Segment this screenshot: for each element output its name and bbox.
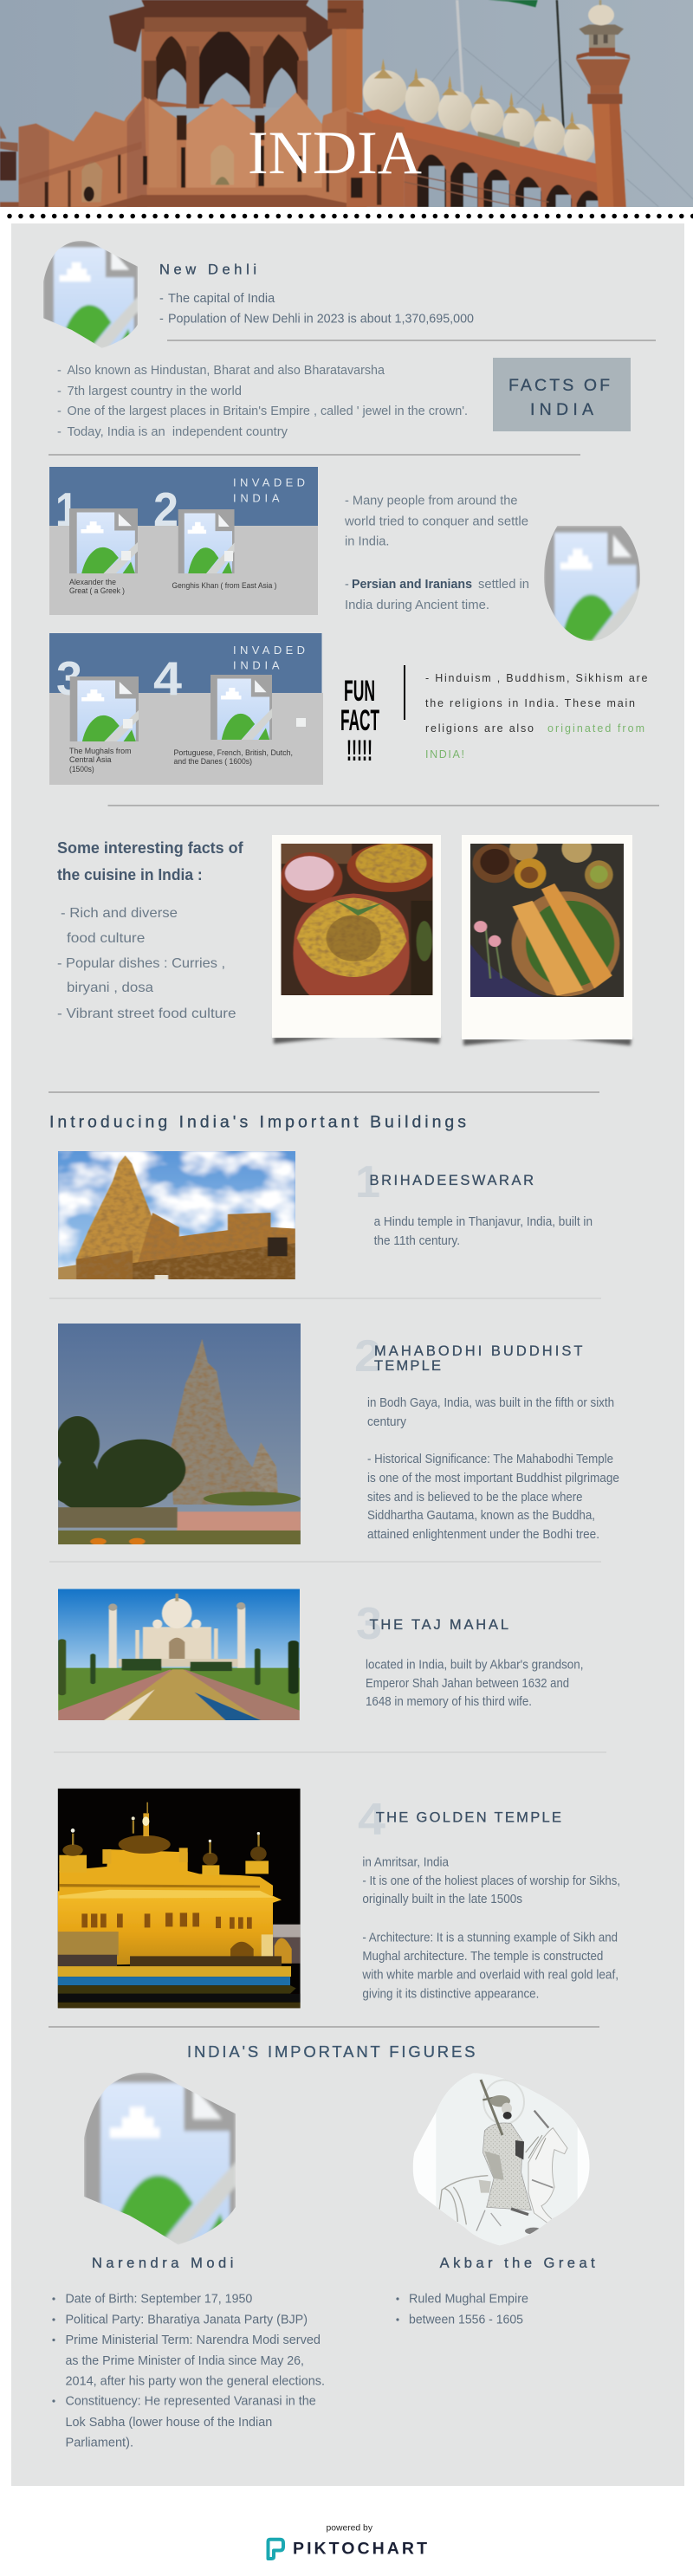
hero photo: Red Fort <box>0 0 693 207</box>
number 3: 3 <box>56 651 82 705</box>
text: Golden Temple description: originally built in the late 1500s <box>362 1893 522 1906</box>
caption: Alexander <box>69 578 125 595</box>
text: facts list: Also known as Hindustan, Bharat and also Bharatavarsha <box>68 364 385 378</box>
image: Modi blob placeholder <box>84 2072 236 2245</box>
section: Taj Mahal <box>58 1589 584 1720</box>
name: Narendra Modi: Narendra Modi <box>92 2256 233 2271</box>
text: Modi bullet list: as the Prime Minister of India since May 26, <box>66 2354 304 2368</box>
text: cuisine list: - Rich and diverse <box>61 906 178 921</box>
text: Piktochart wordmark: PIKTOCHART <box>293 2540 427 2559</box>
callout: facts of India box: INDIA <box>530 400 593 419</box>
text: cuisine list: biryani , dosa <box>67 981 153 995</box>
text: invaders description: - Many people from around the <box>345 495 518 508</box>
text: Mahabodhi description: in Bodh Gaya, India, was built in the fifth or sixth <box>367 1396 614 1410</box>
heading: fun fact: !!!!! <box>346 735 372 767</box>
text: Golden Temple description: - Architecture: It is a stunning example of Sikh and <box>362 1932 618 1945</box>
panel: invaded India 3 and 4 <box>49 633 323 785</box>
heading: fun fact: FUN <box>344 675 375 708</box>
text: cuisine list: food culture <box>67 931 145 946</box>
text: Golden Temple description: giving it its distinctive appearance. <box>362 1987 539 2001</box>
text: religions: originated from <box>547 722 644 735</box>
text: invaders description: in India. <box>345 535 390 549</box>
text: Mahabodhi description: century <box>367 1415 407 1429</box>
text: religions: INDIA! <box>425 748 464 761</box>
icon: Piktochart logo <box>269 2540 283 2559</box>
heading: Mahabodhi: MAHABODHI BUDDHIST <box>374 1343 582 1359</box>
text: facts list: - <box>57 405 62 418</box>
text: Mahabodhi description: Siddhartha Gautama, known as the Buddha, <box>367 1509 595 1523</box>
text: Modi bullet list: Parliament). <box>66 2436 133 2450</box>
pavilion <box>141 20 308 107</box>
text: religions: the religions in India. These main <box>425 697 635 709</box>
text: facts list: 7th largest country in the world <box>68 385 242 398</box>
section: New Delhi <box>43 241 474 348</box>
text: religions: - Hinduism , Buddhism, Sikhism are <box>425 672 648 684</box>
text: Modi bullet list: Constituency: He represented Varanasi in the <box>66 2395 316 2409</box>
heading: invaded India: INVADED <box>233 476 305 489</box>
text: Taj Mahal description: located in India, built by Akbar's grandson, <box>366 1658 584 1672</box>
section: Narendra Modi <box>52 2073 325 2450</box>
text: Mahabodhi description: is one of the most important Buddhist pilgrimage <box>367 1472 619 1485</box>
text: powered by: powered by <box>326 2522 373 2533</box>
number 4: 4 <box>153 651 182 705</box>
footer: powered by Piktochart <box>269 2522 427 2559</box>
section: Mahabodhi <box>53 1324 619 1545</box>
text: Modi bullet list: Lok Sabha (lower house of the Indian <box>66 2416 272 2430</box>
caption: Mughals <box>69 747 132 773</box>
image: Alexander placeholder <box>69 508 138 573</box>
text: Mahabodhi description: - Historical Significance: The Mahabodhi Temple <box>367 1453 613 1466</box>
heading: Golden Temple: THE GOLDEN TEMPLE <box>376 1810 561 1826</box>
text: facts list: - <box>57 425 62 439</box>
domes <box>363 70 407 113</box>
number 2: 2 <box>153 482 178 536</box>
text: Modi bullet list: Political Party: Bharatiya Janata Party (BJP) <box>66 2313 308 2327</box>
heading: Taj Mahal: THE TAJ MAHAL <box>369 1617 508 1633</box>
image: oval placeholder <box>544 526 640 641</box>
text: Golden Temple description <box>361 1856 620 2001</box>
text: Modi bullet list: 2014, after his party won the general elections. <box>66 2375 325 2389</box>
tall tower <box>332 29 362 113</box>
dotted divider <box>10 214 693 218</box>
text: facts list <box>57 364 468 439</box>
text: New Delhi facts <box>159 292 474 327</box>
text: Taj Mahal description: 1648 in memory of his third wife. <box>366 1695 532 1709</box>
number 4: 4 <box>358 1795 385 1845</box>
arcade <box>405 130 606 207</box>
text: Golden Temple description: - It is one of the holiest places of worship for Sikhs, <box>362 1874 620 1888</box>
text: invaders description: world tried to conquer and settle <box>344 515 528 529</box>
base wall <box>19 93 366 208</box>
text: Mahabodhi description <box>367 1396 619 1542</box>
text: facts list: - <box>57 364 62 378</box>
text: invaders description: - <box>345 578 349 592</box>
heading: Brihadeeswarar: BRIHADEESWARAR <box>369 1173 534 1188</box>
image: Mughals placeholder <box>70 676 139 741</box>
photo: Taj Mahal <box>58 1589 300 1720</box>
section: Brihadeeswarar <box>58 1151 593 1279</box>
text: religions <box>425 672 648 761</box>
heading: Mahabodhi <box>374 1343 582 1374</box>
caption: Mughals: The Mughals from <box>69 747 132 755</box>
text: Brihadeeswarar description: the 11th century. <box>374 1234 460 1248</box>
text: New Delhi facts: Population of New Dehli in 2023 is about 1,370,695,000 <box>168 313 474 327</box>
callout: facts of India box <box>493 358 631 431</box>
section: cuisine <box>57 835 632 1045</box>
text: Brihadeeswarar description <box>374 1215 593 1248</box>
photo: Mahabodhi temple <box>58 1324 301 1544</box>
heading: Mahabodhi: TEMPLE <box>374 1358 441 1374</box>
heading: invaded India: INVADED <box>233 644 305 657</box>
photo card: dosa <box>462 835 632 1045</box>
caption: Mughals: Central Asia <box>69 755 111 764</box>
panel: invaded India 1 and 2 <box>49 467 318 615</box>
number 1: 1 <box>355 1157 380 1207</box>
image: Europeans placeholder <box>210 675 272 740</box>
text: cuisine list: - Vibrant street food culture <box>57 1006 236 1021</box>
callout: facts of India box: FACTS OF <box>508 376 610 395</box>
text: cuisine list <box>57 906 236 1021</box>
heading: important figures: INDIA'S IMPORTANT FIGURES <box>187 2042 475 2061</box>
text: invaders description: India during Ancient time. <box>345 599 489 612</box>
number 1: 1 <box>55 482 78 536</box>
heading: invaded India <box>233 476 305 504</box>
caption: Alexander: Great ( a Greek ) <box>69 586 125 595</box>
text: Modi bullet list <box>52 2293 325 2450</box>
text: Akbar bullet list: Ruled Mughal Empire <box>409 2293 528 2307</box>
text: Modi bullet list: Date of Birth: September 17, 1950 <box>66 2293 252 2307</box>
image: Genghis Khan placeholder <box>178 509 235 573</box>
heading: cuisine <box>57 839 244 883</box>
section: Golden Temple <box>58 1789 620 2008</box>
heading: invaded India: INDIA <box>233 491 280 504</box>
heading: cuisine: Some interesting facts of <box>57 839 244 857</box>
icon: New Delhi blob image <box>43 241 138 348</box>
text: Golden Temple description: Mughal architecture. The temple is constructed <box>362 1950 603 1964</box>
text: Brihadeeswarar description: a Hindu temple in Thanjavur, India, built in <box>374 1215 593 1229</box>
heading: invaded India <box>233 644 305 672</box>
photo: Golden Temple <box>57 1788 301 2008</box>
heading: fun fact <box>340 675 379 767</box>
text: facts list: Today, India is an independent country <box>68 425 288 439</box>
number 3: 3 <box>356 1599 382 1649</box>
text: Akbar bullet list: between 1556 - 1605 <box>409 2313 523 2327</box>
text: New Delhi facts: - <box>159 313 164 327</box>
caption: Europeans <box>173 748 293 766</box>
text: facts list: - <box>57 385 62 398</box>
minaret <box>592 104 626 207</box>
image: Akbar portrait blob <box>412 2074 589 2245</box>
text: Mahabodhi description: attained enlightenment under the Bodhi tree. <box>367 1528 599 1542</box>
text: Golden Temple description: with white marble and overlaid with real gold leaf, <box>361 1968 619 1982</box>
caption: Europeans: Portuguese, French, British, Dutch, <box>173 748 293 757</box>
text: invaders description <box>344 495 529 612</box>
photo card: biryani <box>272 835 441 1044</box>
text: Akbar bullet list <box>396 2293 528 2327</box>
text: New Delhi facts: The capital of India <box>168 292 275 306</box>
title: INDIA <box>248 120 422 187</box>
text: religions: religions are also <box>425 722 534 735</box>
section: Akbar the Great <box>396 2066 598 2327</box>
photo: Brihadeeswarar temple <box>58 1151 295 1279</box>
text: Mahabodhi description: sites and is believed to be the place where <box>367 1491 582 1505</box>
number 2: 2 <box>354 1331 381 1382</box>
text: New Delhi facts: - <box>159 292 164 306</box>
text: invaders description: Persian and Iranians <box>352 578 472 592</box>
callout: fun fact: FACT <box>340 704 379 737</box>
text: invaders description: settled in <box>478 578 529 592</box>
heading: New Dehli: New Dehli <box>159 262 256 278</box>
text: Taj Mahal description <box>366 1658 584 1709</box>
caption: Mughals: (1500s) <box>69 765 94 773</box>
caption: Alexander: Alexander the <box>69 578 116 586</box>
text: cuisine list: - Popular dishes : Curries , <box>57 956 225 971</box>
heading: cuisine: the cuisine in India : <box>57 866 203 883</box>
section: facts of India <box>57 358 631 439</box>
callout: fun fact <box>340 665 648 767</box>
text: facts list: One of the largest places in Britain's Empire , called ' jewel in the crown'. <box>68 405 468 418</box>
caption: Genghis Khan: Genghis Khan ( from East Asia ) <box>172 581 277 590</box>
heading: important buildings: Introducing India's Important Buildings <box>49 1113 466 1132</box>
text: Golden Temple description: in Amritsar, India <box>362 1856 450 1870</box>
name: Akbar the Great: Akbar the Great <box>440 2256 595 2271</box>
heading: invaded India: INDIA <box>233 659 280 672</box>
text: Taj Mahal description: Emperor Shah Jahan between 1632 and <box>366 1677 569 1691</box>
text: Modi bullet list: Prime Ministerial Term: Narendra Modi served <box>66 2333 321 2347</box>
caption: Europeans: and the Danes ( 1600s) <box>173 757 252 766</box>
